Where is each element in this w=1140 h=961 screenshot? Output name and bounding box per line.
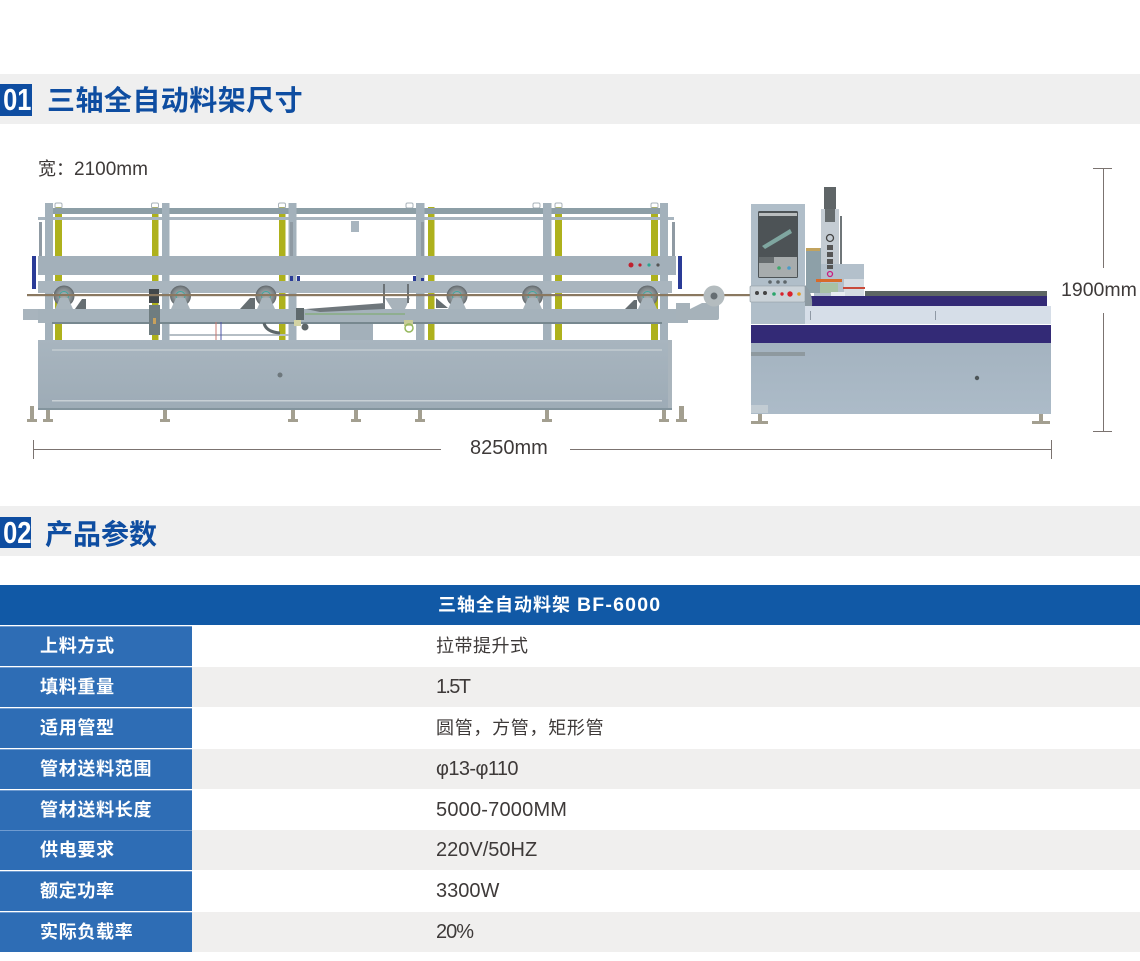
control console: [750, 204, 812, 324]
upper beam: [38, 256, 676, 275]
rack body: [38, 340, 672, 410]
machine drawing and dimension lines: [23, 168, 1112, 459]
height dimension line: [1093, 168, 1112, 432]
cutting machine: [750, 187, 1051, 424]
row: 实际负载率: [0, 912, 1140, 952]
cutting head details: [816, 279, 865, 298]
motor: [149, 289, 160, 335]
row: 上料方式: 拉带提升式: [436, 636, 528, 656]
length label: 8250mm: [470, 437, 548, 459]
touch screen: [758, 211, 798, 278]
console side knob: [805, 285, 812, 306]
badge 01: 01: [3, 82, 31, 117]
row: 供电要求: 供电要求: [40, 840, 115, 860]
section header: 02: [0, 506, 1140, 556]
hoses: [216, 322, 280, 340]
blue sensors: [32, 256, 682, 291]
length dimension line: [33, 440, 1052, 459]
row: 上料方式: 上料方式: [40, 636, 115, 656]
row: 管材送料范围: φ13-φ110: [436, 758, 518, 780]
row: 额定功率: 3300W: [436, 880, 499, 902]
section header: 01: [0, 74, 1140, 124]
heading: 产品参数: 产品参数: [45, 519, 157, 550]
beam indicator lights: [628, 262, 660, 268]
rollers: [54, 286, 658, 306]
row: 适用管型: 适用管型: [40, 718, 115, 738]
row: 供电要求: [0, 830, 1140, 870]
top rails: [38, 208, 674, 220]
roller pedestals: [55, 298, 657, 309]
rail bracket: [351, 221, 359, 232]
yellow lift belts: [55, 207, 658, 345]
row: 填料重量: 1.5T: [436, 676, 469, 698]
row: 管材送料范围: [0, 749, 1140, 789]
row: 额定功率: [0, 871, 500, 911]
side pieces: [39, 222, 675, 256]
row: 管材送料长度: 管材送料长度: [40, 800, 152, 820]
rack feet: [27, 406, 687, 422]
badge 02: 02: [3, 515, 31, 550]
row: 额定功率: 额定功率: [40, 881, 115, 901]
roller hubs: [60, 292, 652, 300]
heading: 三轴全自动料架尺寸: 三轴全自动料架尺寸: [47, 85, 303, 116]
feed cylinder: [294, 284, 413, 332]
knobs: [768, 280, 787, 284]
upright posts: [45, 203, 668, 343]
machine feet: [751, 414, 1050, 424]
table header: [0, 585, 1140, 625]
brackets: [75, 298, 637, 309]
row: 管材送料长度: 5000-7000MM: [436, 799, 567, 821]
row: 适用管型: [0, 708, 604, 748]
machine base: [751, 343, 1051, 414]
saw column: [806, 187, 864, 299]
navy top rail: [810, 296, 1047, 306]
middle slat: [38, 281, 672, 293]
end guide roller: [704, 286, 724, 306]
light band: [805, 306, 1051, 324]
wheel beam: [23, 303, 719, 324]
thin cross rail: [169, 334, 289, 336]
belt top loops: [55, 203, 658, 208]
feeding rack: [23, 203, 751, 422]
column logo: [826, 234, 834, 276]
row: 管材送料长度: [0, 790, 567, 830]
dark top bar: [865, 291, 1047, 296]
height label: 1900mm: [1061, 279, 1137, 301]
width label: 宽：2100mm: [38, 159, 148, 180]
row: 适用管型: 圆管，方管，矩形管: [436, 718, 604, 738]
row: 填料重量: [0, 667, 1140, 707]
row: 管材送料范围: 管材送料范围: [40, 759, 152, 779]
button panel: [750, 286, 805, 302]
lower frame opening: [340, 324, 373, 340]
tube on rollers: [27, 294, 751, 296]
row: 实际负载率: 实际负载率: [40, 922, 134, 942]
row: 实际负载率: 20%: [436, 921, 473, 943]
navy band: [751, 325, 1051, 343]
row: 填料重量: 填料重量: [40, 677, 115, 697]
row: 供电要求: 220V/50HZ: [436, 839, 537, 861]
row: 上料方式: [0, 626, 528, 666]
table header: 三轴全自动料架 BF-6000: [438, 594, 661, 616]
